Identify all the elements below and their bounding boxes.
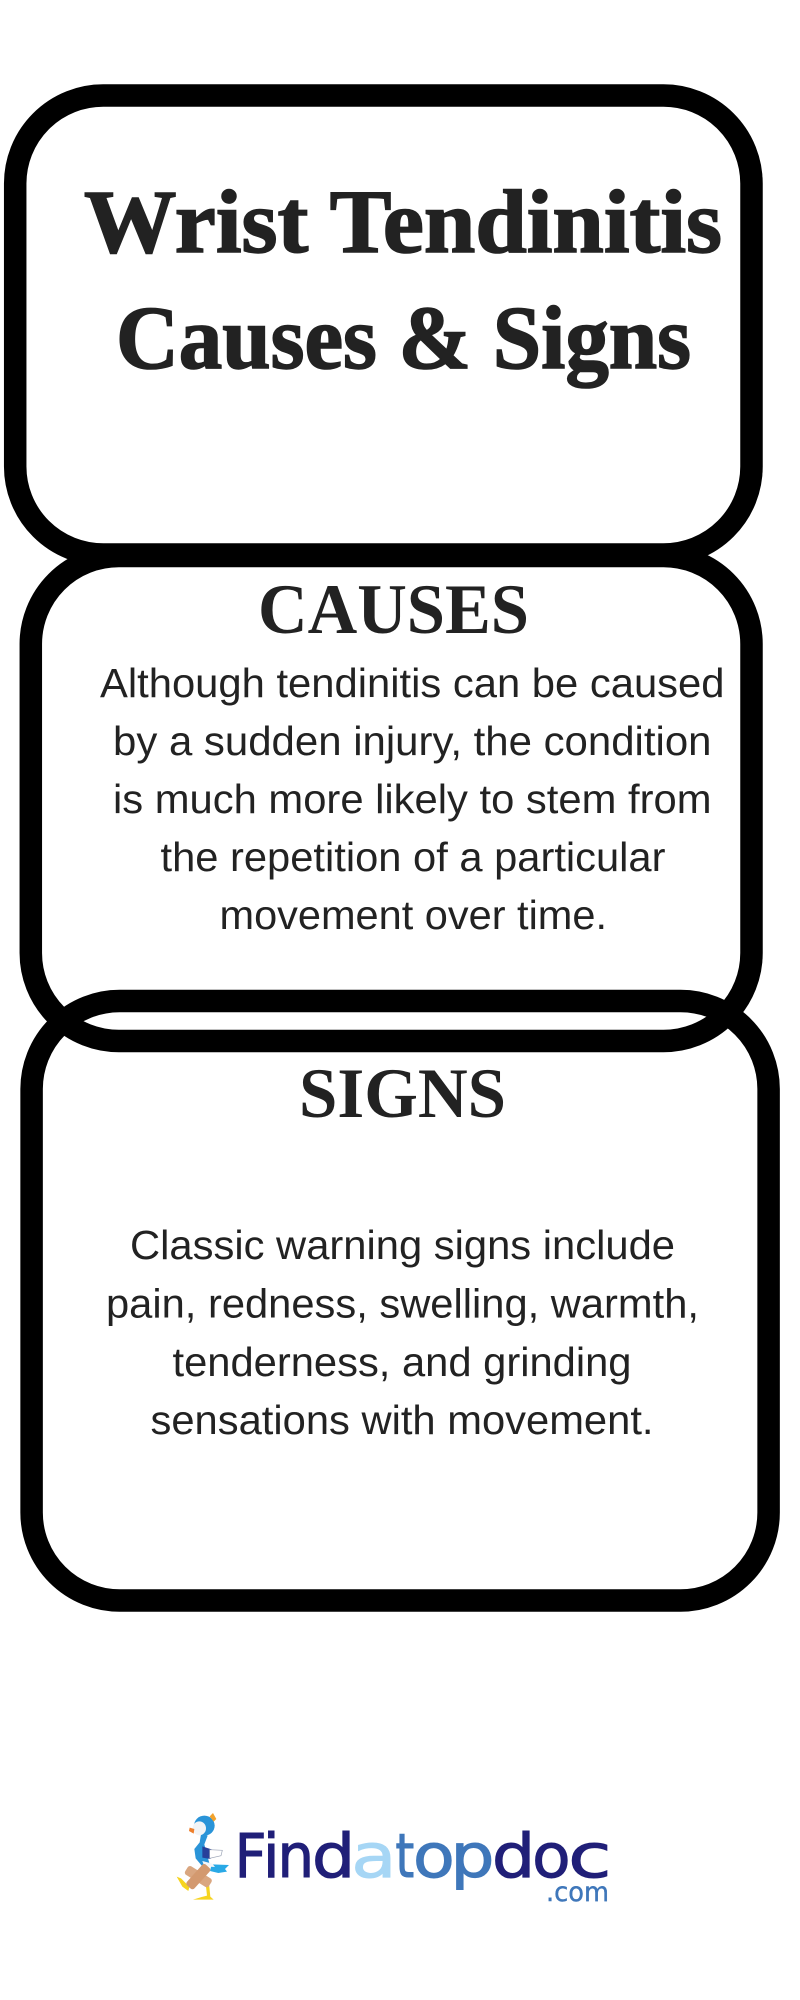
- wordmark: d: [492, 1821, 535, 1892]
- text block: causes description: Although tendinitis can be caused: [100, 660, 724, 706]
- panel: causes: [31, 556, 752, 1041]
- title panel outline: [15, 96, 751, 554]
- text block: causes description: is much more likely to stem from: [113, 776, 712, 822]
- wordmark: o: [413, 1821, 455, 1892]
- wordmark: a: [351, 1821, 397, 1892]
- text block: signs description: Classic warning signs include: [130, 1222, 675, 1268]
- icon: duck mascot with bandage: [177, 1813, 229, 1900]
- causes panel outline: [31, 556, 752, 1041]
- signs panel outline: [32, 1001, 769, 1600]
- panel: signs: [32, 1001, 769, 1600]
- text block: signs description: tenderness, and grinding: [172, 1339, 632, 1385]
- text block: causes description: [100, 660, 724, 938]
- wordmark: [235, 1821, 612, 1908]
- wordmark: i: [263, 1821, 280, 1892]
- text block: signs description: [106, 1222, 699, 1443]
- panel: title: [15, 96, 751, 554]
- text block: causes description: by a sudden injury, the condition: [113, 718, 712, 764]
- wordmark: d: [312, 1821, 355, 1892]
- wordmark: .com: [546, 1877, 609, 1908]
- title: Wrist Tendinitis: [84, 173, 722, 272]
- wordmark: t: [395, 1821, 414, 1892]
- wordmark: c: [568, 1821, 612, 1892]
- heading: signs: SIGNS: [299, 1055, 506, 1133]
- title: Causes & Signs: [116, 289, 691, 388]
- wordmark: F: [235, 1821, 267, 1892]
- wordmark: p: [450, 1821, 495, 1892]
- wordmark: n: [277, 1821, 314, 1892]
- text block: causes description: movement over time.: [220, 892, 607, 938]
- heading: causes: CAUSES: [258, 571, 529, 649]
- text block: signs description: pain, redness, swelling, warmth,: [106, 1280, 699, 1326]
- title: [84, 173, 722, 388]
- text block: signs description: sensations with movement.: [150, 1397, 654, 1443]
- wordmark: o: [532, 1821, 571, 1892]
- text block: causes description: the repetition of a particular: [160, 834, 666, 880]
- logo: Findatopdoc: [177, 1813, 612, 1908]
